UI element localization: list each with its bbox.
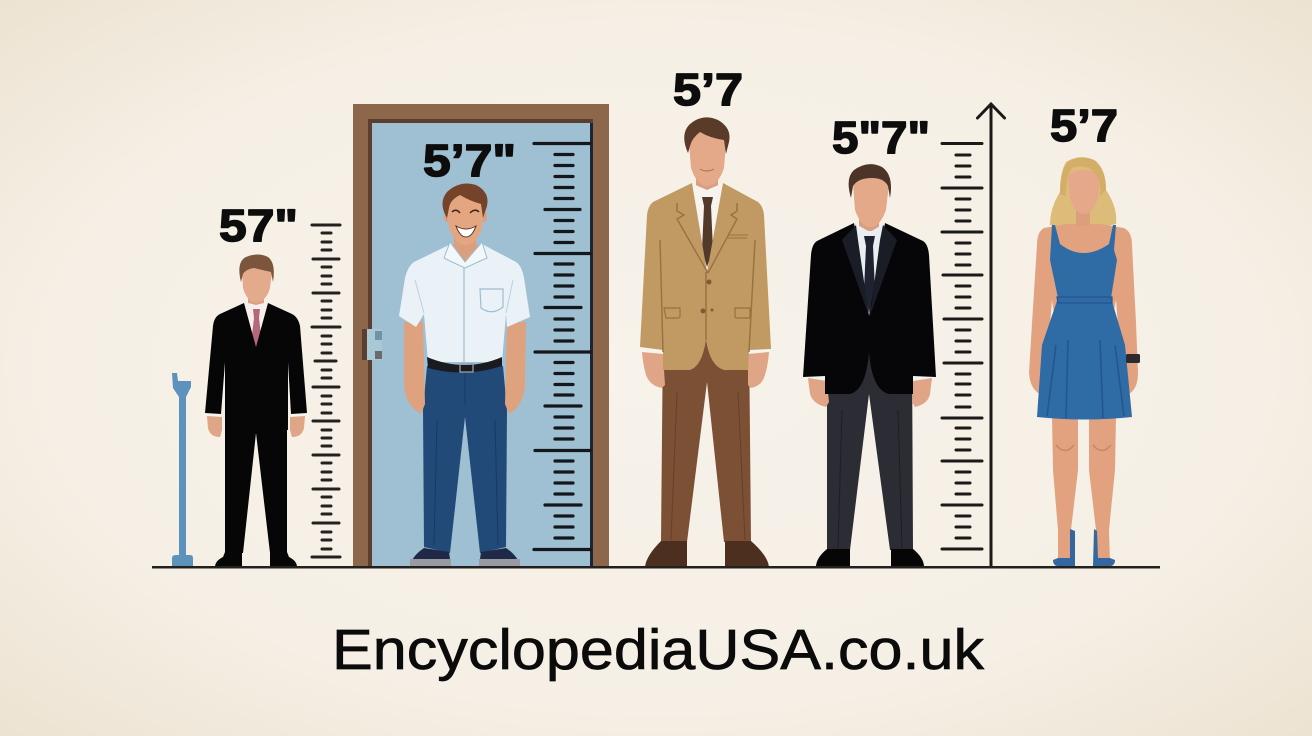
lapels [842, 225, 869, 316]
tie [252, 309, 261, 347]
buttons [706, 280, 712, 284]
figure: smiling man in white shirt [399, 184, 530, 566]
right height ruler with arrow [942, 104, 1004, 567]
ground line [152, 566, 1160, 568]
arms [404, 322, 425, 414]
belt [427, 357, 502, 373]
cuffs [805, 372, 826, 381]
hands [808, 378, 829, 407]
torso and arms [1029, 224, 1138, 395]
head [242, 267, 272, 302]
face [853, 172, 889, 227]
hands [642, 352, 665, 388]
figure: man in black jacket [803, 164, 936, 567]
hands [207, 416, 222, 437]
hair back [1050, 157, 1116, 228]
tie [702, 197, 713, 267]
neck [448, 232, 484, 268]
door frame with blue height chart [353, 104, 609, 567]
trousers [661, 330, 751, 542]
shoes [1053, 529, 1075, 566]
ears [444, 210, 450, 222]
shirt [399, 244, 530, 362]
neck [696, 170, 718, 190]
blue measuring stand [172, 373, 193, 567]
shirt [854, 223, 885, 310]
height label 5'7 woman: 5’7 [1050, 100, 1118, 151]
hair [849, 164, 891, 198]
trousers [423, 366, 507, 553]
face [447, 194, 484, 245]
watch [1126, 354, 1140, 363]
shoes [645, 541, 687, 567]
dress [1037, 225, 1132, 420]
cuffs [641, 347, 663, 354]
shoes [410, 548, 451, 566]
jacket [803, 223, 936, 394]
jacket [205, 303, 307, 430]
door height scale [534, 144, 590, 550]
left height ruler [312, 225, 340, 557]
figure: woman in blue dress [1029, 157, 1140, 566]
height label 5'7" on door: 5’7" [423, 135, 516, 186]
hair [684, 117, 730, 154]
height label 5"7": 5"7" [832, 112, 930, 163]
face [1076, 206, 1090, 226]
website footer text: EncyclopediaUSA.co.uk [332, 618, 985, 681]
height label 57": 57" [219, 200, 298, 251]
shoes [816, 549, 850, 567]
tie [864, 236, 875, 313]
height label 5'7 centre man: 5’7 [673, 64, 743, 115]
arrow [990, 104, 992, 567]
face [689, 128, 726, 186]
neck [859, 215, 879, 231]
hair front [1060, 157, 1106, 196]
door latch [362, 329, 382, 360]
shoes [215, 552, 242, 567]
figure: small man in black suit [205, 254, 307, 567]
trousers [225, 425, 287, 553]
jacket [640, 183, 771, 370]
trousers [827, 345, 913, 550]
hair [442, 184, 488, 218]
figure: tall man in tan jacket [640, 117, 771, 567]
legs [1052, 416, 1078, 562]
shirt [691, 183, 724, 280]
